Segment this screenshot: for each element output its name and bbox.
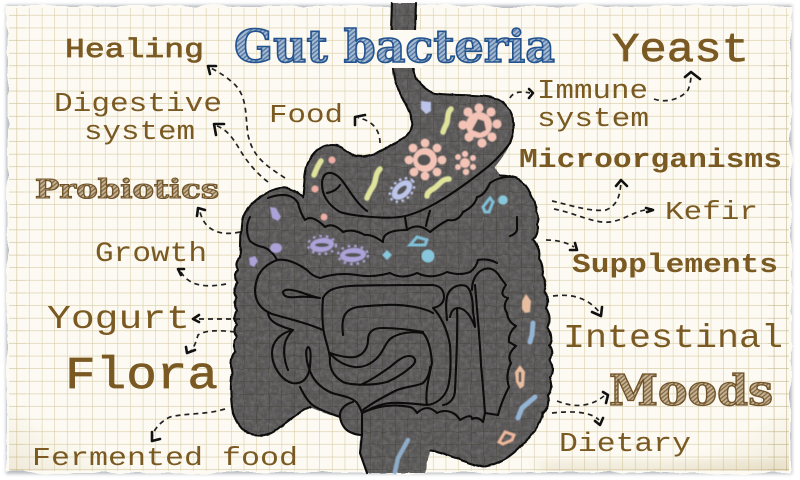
arrow: to Dietary [552,412,603,425]
label: Growth: Growth [95,239,207,270]
arrow: to Intestinal [553,295,602,316]
arrow: to Food [355,115,380,143]
bacteria: stomach and colon microbes [249,101,535,472]
label: Yogurt: Yogurt [47,301,190,338]
yellow worms [314,109,451,198]
arrow: to Healing [208,66,285,178]
pink flower medium [405,139,446,180]
body silhouette [231,3,552,473]
label: Flora: Flora [65,351,218,402]
arrow: to Supplements [546,240,577,250]
label: Digestive system: Digestive [54,90,222,120]
purple bacteria in colon [249,207,368,267]
label: Immune system [537,77,649,135]
label: Supplements: Supplements [572,251,778,281]
arrows: dashed connectors [152,66,700,441]
label: Healing: Healing [65,36,204,66]
arrow: to Probiotics [197,208,240,233]
label: Probiotics: Probiotics [35,175,219,205]
arrow: to Immune system [510,89,533,98]
pink dots [311,156,336,220]
label: Dietary: Dietary [559,430,691,460]
blue bacteria [382,195,508,262]
arrow: to Kefir [554,208,653,222]
arrow: to Yeast [654,72,700,101]
title: Gut bacteria: Gut bacteria [234,20,555,73]
label: Yeast: Yeast [612,28,749,74]
label: Immune system: Immune [537,77,648,107]
inner intestine outlines [247,143,517,473]
label: Digestive system: system [84,118,195,148]
arrow: to Flora [186,331,235,353]
label: Digestive system [54,90,222,148]
arrow: to Growth [178,269,226,286]
label: Moods: Moods [609,366,773,415]
illustration: digestive system [231,3,552,473]
arrow: to Moods [557,392,608,405]
label: Food: Food [269,100,343,130]
label: Kefir: Kefir [665,197,758,227]
pink flower small [455,151,476,175]
arrow: to Digestive system [214,124,268,182]
label: Immune system: system [537,105,649,135]
label: Intestinal: Intestinal [563,320,783,357]
lilac bacteria in stomach [385,101,431,206]
label: Microorganisms: Microorganisms [519,146,782,176]
arrow: to Yogurt [193,315,240,322]
pink flower large [458,103,502,148]
descending colon bacteria [395,294,535,472]
label: Fermented food: Fermented food [32,443,298,473]
arrow: to Microorganisms [552,180,627,210]
arrow: to Fermented food [152,409,225,441]
